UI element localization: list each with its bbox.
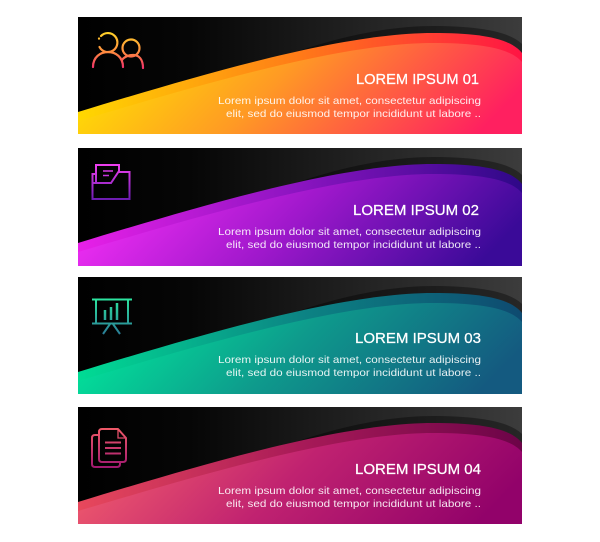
text block 01: elit, sed do eiusmod tempor incididunt ut labore .. xyxy=(226,108,481,120)
heading 04: LOREM IPSUM 04 xyxy=(355,462,481,478)
text block 03: elit, sed do eiusmod tempor incididunt ut labore .. xyxy=(226,367,481,379)
text block 02: Lorem ipsum dolor sit amet, consectetur adipiscing xyxy=(218,226,481,238)
icon: documents xyxy=(92,429,126,467)
icon: folder xyxy=(92,165,130,199)
text block 01: Lorem ipsum dolor sit amet, consectetur adipiscing xyxy=(218,95,481,107)
panel: lorem ipsum 02 xyxy=(78,148,522,266)
text block 02: elit, sed do eiusmod tempor incididunt ut labore .. xyxy=(226,239,481,251)
heading 03: LOREM IPSUM 03 xyxy=(355,331,481,347)
heading 02: LOREM IPSUM 02 xyxy=(353,203,479,219)
panel: lorem ipsum 03 xyxy=(78,277,522,394)
icon: presentation board xyxy=(92,300,132,334)
text block 04: elit, sed do eiusmod tempor incididunt ut labore .. xyxy=(226,498,481,510)
text block 03: Lorem ipsum dolor sit amet, consectetur adipiscing xyxy=(218,354,481,366)
heading 01: LOREM IPSUM 01 xyxy=(356,72,479,88)
panel: lorem ipsum 01 xyxy=(78,17,522,134)
icon: two people xyxy=(93,33,143,68)
text block 04: Lorem ipsum dolor sit amet, consectetur adipiscing xyxy=(218,485,481,497)
panel: lorem ipsum 04 xyxy=(78,407,522,524)
